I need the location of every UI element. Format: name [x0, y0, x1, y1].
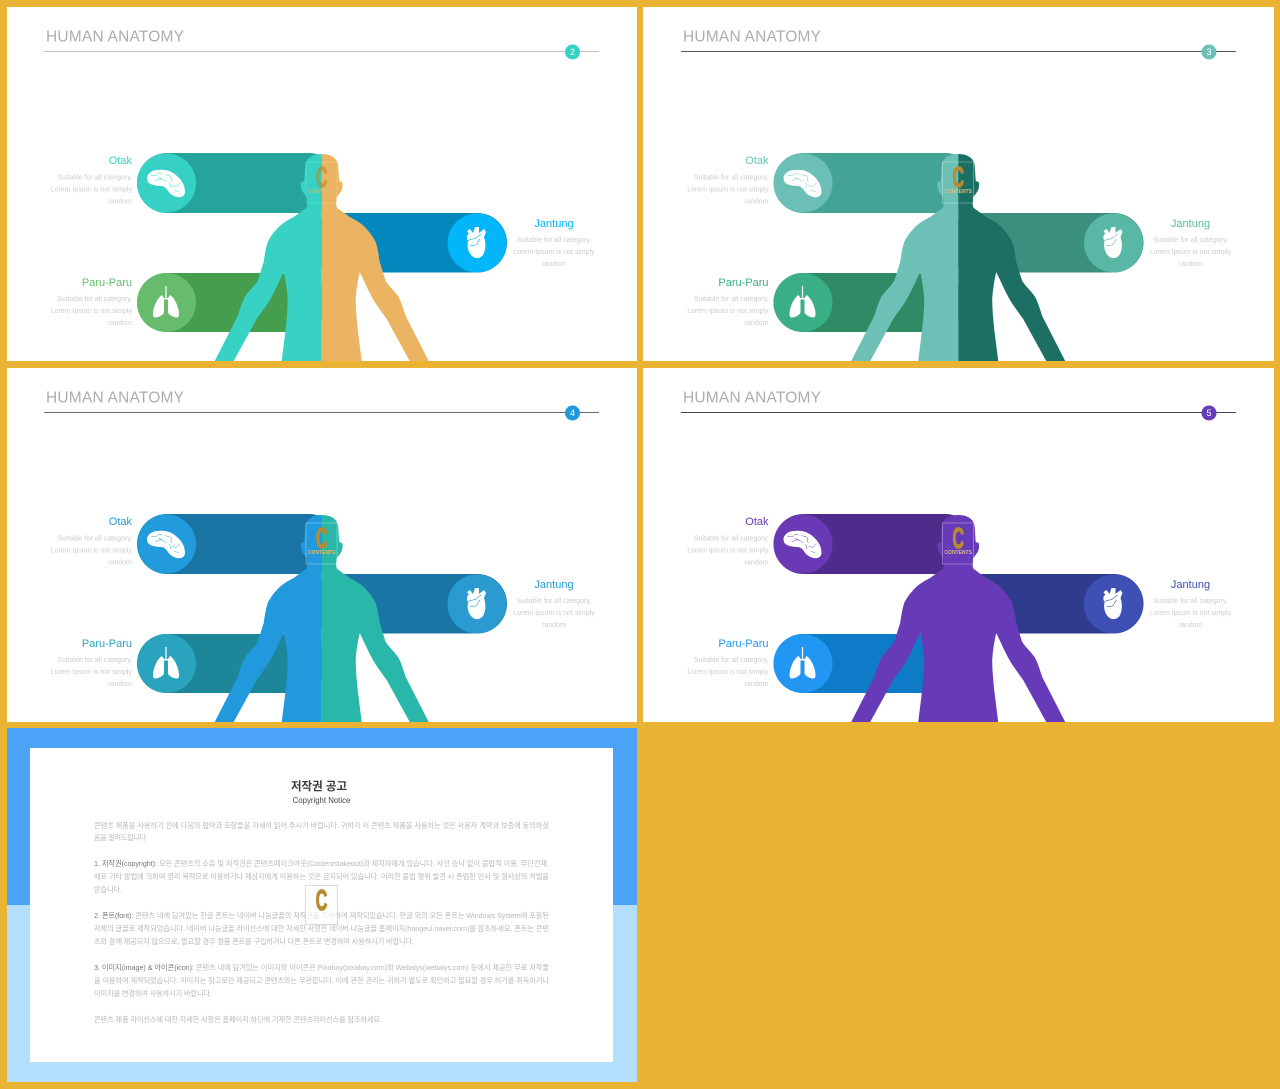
label: Otak: [51, 155, 132, 206]
bar: Jantung: [946, 574, 1144, 634]
bar: Otak: [774, 153, 976, 213]
label: Jantung: [513, 218, 595, 268]
header rule and page number: [681, 44, 1236, 60]
watermark: [942, 161, 974, 203]
panel: slide 2 teal and orange anatomy: [7, 7, 637, 361]
notice body text: 콘텐츠 제품을 사용하기 전에 다음의 협약과 조항들을 자세히 읽어 주시기 바랍니다. 귀하가 이 콘텐츠 제품을 사용하는 것은 사용자 계약과 보증에 동의하셨: [94, 821, 549, 830]
label: Otak: Suitable for all category,: [57, 174, 132, 182]
label: Otak: random: [108, 198, 132, 206]
label: Otak: [687, 516, 769, 566]
label: Paru-Paru: [51, 277, 132, 327]
label: Jantung: [1150, 579, 1232, 629]
label: Otak: Suitable for all category,: [694, 536, 769, 542]
label: Paru-Paru: Lorem Ipsum is not simply: [687, 308, 769, 315]
label: Paru-Paru: random: [745, 320, 769, 327]
header rule and page number: [44, 406, 599, 420]
label: Jantung: random: [542, 261, 566, 268]
watermark: CONTENTS: [308, 189, 336, 195]
watermark: C: [316, 161, 328, 193]
heading: HUMAN ANATOMY: [46, 28, 184, 46]
label: Paru-Paru: random: [745, 681, 769, 688]
label: Jantung: Jantung: [1171, 579, 1210, 591]
label: Otak: Lorem Ipsum is not simply: [687, 186, 769, 194]
notice body text: 1. 저작권(copyright): 모든 콘텐츠의 소유 및 저작권은 콘텐츠메이크아웃(Contentstakeout)과 제작자에게 있습니다. 사전 승낙 없이 불법적 이용, 무단전재,: [94, 859, 549, 868]
label: Jantung: Suitable for all category,: [1153, 598, 1228, 605]
panel: slide 3 green anatomy: [643, 7, 1274, 361]
watermark: C: [316, 522, 328, 554]
header rule and page number: 3: [1206, 47, 1212, 57]
label: Otak: random: [108, 560, 132, 566]
panel: slide 4 blue anatomy: [7, 368, 637, 722]
notice subtitle: Copyright Notice: [293, 796, 350, 805]
header rule and page number: 2: [570, 47, 575, 57]
label: Paru-Paru: Suitable for all category,: [57, 296, 132, 303]
bar: Paru-Paru: [774, 273, 964, 332]
label: Paru-Paru: Paru-Paru: [82, 277, 132, 289]
notice body text: 3. 이미지(image) & 아이콘(icon): 콘텐츠 내에 담겨있는 이미지와 아이콘은 Pixabay(pixabay.com)와 Webalys(webalys.com) 등에서 제공한 무료 저작물: [94, 963, 549, 972]
watermark: [306, 161, 337, 203]
label: Otak: random: [745, 560, 769, 566]
label: Jantung: Lorem Ipsum is not simply: [1150, 610, 1232, 617]
notice body text: 음을 알려드립니다.: [94, 833, 148, 842]
header rule and page number: 4: [570, 408, 575, 418]
label: Paru-Paru: [687, 277, 769, 327]
notice body text: [94, 821, 549, 1024]
bar: Paru-Paru: [137, 273, 327, 332]
bar: Paru-Paru: [137, 634, 327, 693]
bar: Otak: [774, 514, 976, 574]
label: Otak: Lorem Ipsum is not simply: [687, 548, 769, 554]
body figure: [851, 515, 1065, 722]
watermark: [942, 522, 974, 564]
body figure: [215, 515, 429, 722]
notice body text: 이미지를 변경하여 사용하시기 바랍니다.: [94, 989, 212, 998]
label: Jantung: random: [1179, 261, 1203, 268]
header rule and page number: [44, 44, 599, 60]
bar: Jantung: [946, 213, 1144, 272]
label: Jantung: [1150, 218, 1232, 268]
label: Otak: [687, 155, 769, 206]
body figure: [215, 154, 429, 361]
label: Otak: Suitable for all category,: [57, 536, 132, 542]
label: Otak: Lorem Ipsum is not simply: [51, 186, 132, 194]
label: Otak: Lorem Ipsum is not simply: [51, 548, 132, 554]
label: Jantung: Suitable for all category,: [517, 237, 591, 244]
label: Paru-Paru: Lorem Ipsum is not simply: [51, 308, 132, 315]
header rule and page number: [681, 406, 1236, 420]
label: Jantung: Jantung: [534, 218, 574, 230]
watermark: [306, 884, 338, 924]
label: Jantung: Suitable for all category,: [517, 598, 591, 605]
bar: Jantung: [310, 574, 507, 634]
watermark: C: [952, 161, 964, 193]
label: Paru-Paru: [687, 638, 769, 688]
label: Paru-Paru: Suitable for all category,: [694, 657, 769, 664]
label: Otak: Otak: [745, 155, 769, 167]
watermark: CONTENTS: [944, 189, 973, 195]
label: Jantung: Jantung: [534, 579, 574, 591]
bar: Paru-Paru: [774, 634, 964, 693]
notice body text: 을 이용하여 제작되었습니다. 이미지는 참고로만 제공되고 콘텐츠와는 무관합니다. 이에 관한 권리는 귀하가 별도로 확인하고 필요할 경우 허가를 취득하거나: [94, 976, 549, 985]
label: Jantung: Lorem Ipsum is not simply: [513, 249, 595, 256]
label: Paru-Paru: Lorem Ipsum is not simply: [687, 669, 769, 676]
notice title: 저작권 공고: [291, 779, 347, 793]
bar: Otak: [137, 514, 339, 574]
bar: Jantung: [310, 213, 507, 272]
label: Paru-Paru: random: [108, 320, 132, 327]
label: Jantung: Lorem Ipsum is not simply: [513, 610, 595, 617]
header rule and page number: 5: [1206, 408, 1212, 418]
watermark: C: [316, 884, 327, 916]
notice body text: 받습니다.: [94, 885, 122, 894]
watermark: CONTENTS: [308, 550, 336, 556]
label: Jantung: random: [542, 622, 566, 629]
label: Otak: Suitable for all category,: [694, 174, 769, 182]
watermark: C: [952, 522, 964, 554]
panel: slide 5 purple anatomy: [643, 368, 1274, 722]
label: Paru-Paru: Suitable for all category,: [57, 657, 132, 664]
label: Otak: Otak: [109, 155, 132, 167]
label: Otak: Otak: [109, 516, 132, 528]
label: Jantung: Lorem Ipsum is not simply: [1150, 249, 1232, 256]
watermark: [306, 522, 337, 564]
label: Otak: random: [745, 198, 769, 206]
label: Paru-Paru: Paru-Paru: [82, 638, 132, 650]
label: Paru-Paru: Paru-Paru: [718, 638, 768, 650]
body figure: [851, 154, 1065, 361]
label: Paru-Paru: Lorem Ipsum is not simply: [51, 669, 132, 676]
label: Jantung: random: [1179, 622, 1203, 629]
label: Jantung: Jantung: [1171, 218, 1210, 230]
watermark: CONTENTS: [944, 550, 973, 556]
label: Paru-Paru: [51, 638, 132, 688]
label: Jantung: [513, 579, 595, 629]
notice body text: 2. 폰트(font): 콘텐츠 내에 담겨있는 한글 폰트는 네이버 나눔글꼴의 저작권을 기반하여 제작되었습니다. 한글 외의 모든 폰트는 Windows System에 포함된: [94, 911, 549, 920]
bar: Otak: [137, 153, 339, 213]
heading: HUMAN ANATOMY: [683, 28, 821, 46]
label: Otak: Otak: [745, 516, 769, 528]
heading: HUMAN ANATOMY: [683, 390, 821, 406]
label: Jantung: Suitable for all category,: [1153, 237, 1228, 244]
label: Paru-Paru: random: [108, 681, 132, 688]
label: Paru-Paru: Paru-Paru: [718, 277, 768, 289]
label: Otak: [51, 516, 132, 566]
notice body text: 콘텐츠 제품 라이선스에 대한 자세한 사항은 홈페이지 하단에 기재한 콘텐츠라이선스를 참조하세요.: [94, 1015, 382, 1024]
notice body text: 자체의 글꼴로 제작되었습니다. 네이버 나눔글꼴 라이선스에 대한 자세한 사항은 네이버 나눔글꼴 홈페이지(hangeul.naver.com)를 참조하세요. 폰트는 콘텐: [94, 924, 549, 933]
panel: copyright notice: [7, 728, 637, 1082]
notice body text: 츠와 함께 제공되지 않으므로, 필요할 경우 정품 폰트를 구입하거나 다른 폰트로 변경하여 사용하시기 바랍니다.: [94, 937, 414, 946]
label: Paru-Paru: Suitable for all category,: [694, 296, 769, 303]
heading: HUMAN ANATOMY: [46, 390, 184, 406]
notice body text: 배포 기타 방법에 의하여 영리 목적으로 이용하거나 제삼자에게 이용하는 것은 금지되어 있습니다. 이러한 불법 행위 발견 시 준엄한 민사 및 형사상의 처벌을: [94, 872, 549, 881]
